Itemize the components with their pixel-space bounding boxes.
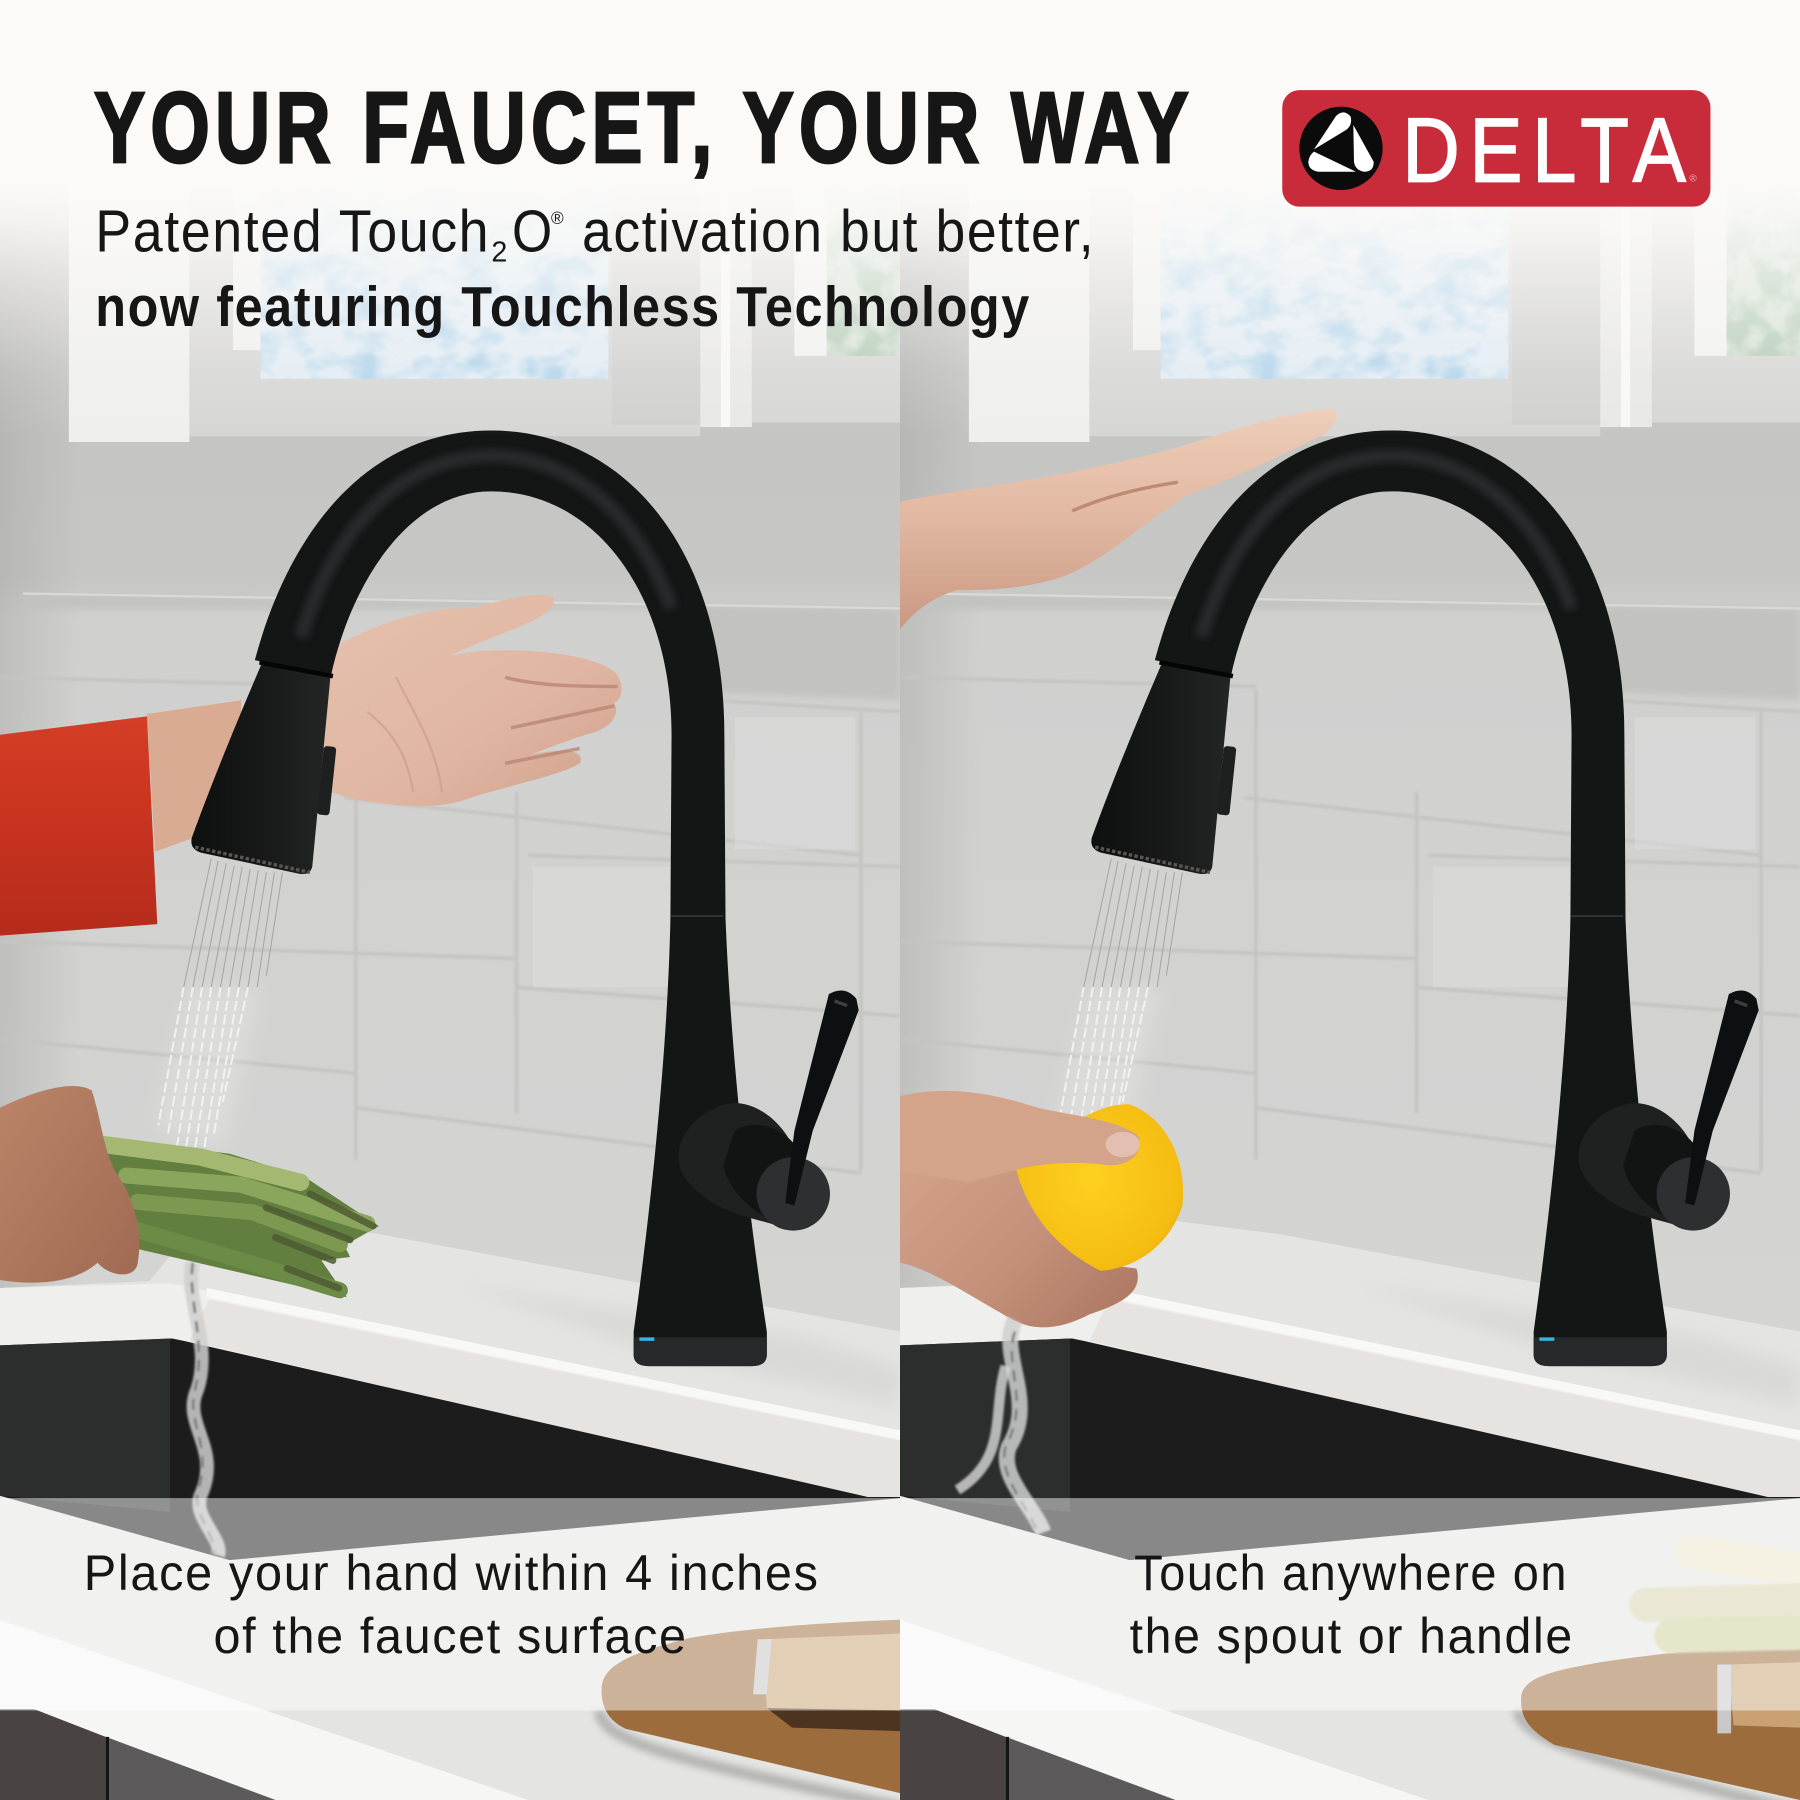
icon: Delta emblem: [1299, 107, 1383, 190]
thumb on lemon: [900, 1091, 1140, 1182]
subtitle: Patented Touch: [95, 197, 490, 264]
hand on spout: [900, 409, 1337, 629]
subtitle: 2: [491, 237, 507, 269]
arm and sleeve: [0, 700, 241, 936]
caption: right: Touch anywhere on: [1134, 1544, 1568, 1601]
caption: left: [84, 1544, 820, 1664]
title: YOUR FAUCET, YOUR WAY: [94, 73, 1194, 184]
subtitle: ®: [551, 208, 564, 228]
caption: right: the spout or handle: [1130, 1607, 1574, 1664]
subtitle: O: [512, 197, 552, 264]
panel: left photo, hand near faucet: [0, 221, 900, 1800]
subtitle: activation but better,: [582, 197, 1095, 264]
logo: Delta: DELTA: [1402, 101, 1696, 202]
subtitle: [95, 197, 1095, 338]
palm under lemon: [900, 1091, 1138, 1327]
asparagus bunch: [98, 1136, 379, 1297]
logo: Delta: ®: [1689, 174, 1697, 185]
lower hand holding asparagus: [0, 1086, 139, 1283]
lemon: [1016, 1104, 1183, 1271]
open hand: [310, 595, 622, 806]
water stream: [957, 1320, 1043, 1533]
caption: left: of the faucet surface: [214, 1607, 688, 1664]
cutting board: [599, 1620, 900, 1800]
logo: Delta: [1282, 90, 1710, 207]
water stream: [191, 1263, 219, 1555]
caption band overlay: [0, 1498, 1800, 1710]
subtitle: now featuring Touchless Technology: [95, 275, 1031, 338]
cutting board and white asparagus: [1518, 1552, 1800, 1800]
caption: left: Place your hand within 4 inches: [84, 1544, 820, 1601]
caption: right: [1130, 1544, 1574, 1664]
panel: right photo, hand touching faucet: [900, 221, 1800, 1800]
top fade overlay: [0, 0, 1800, 436]
